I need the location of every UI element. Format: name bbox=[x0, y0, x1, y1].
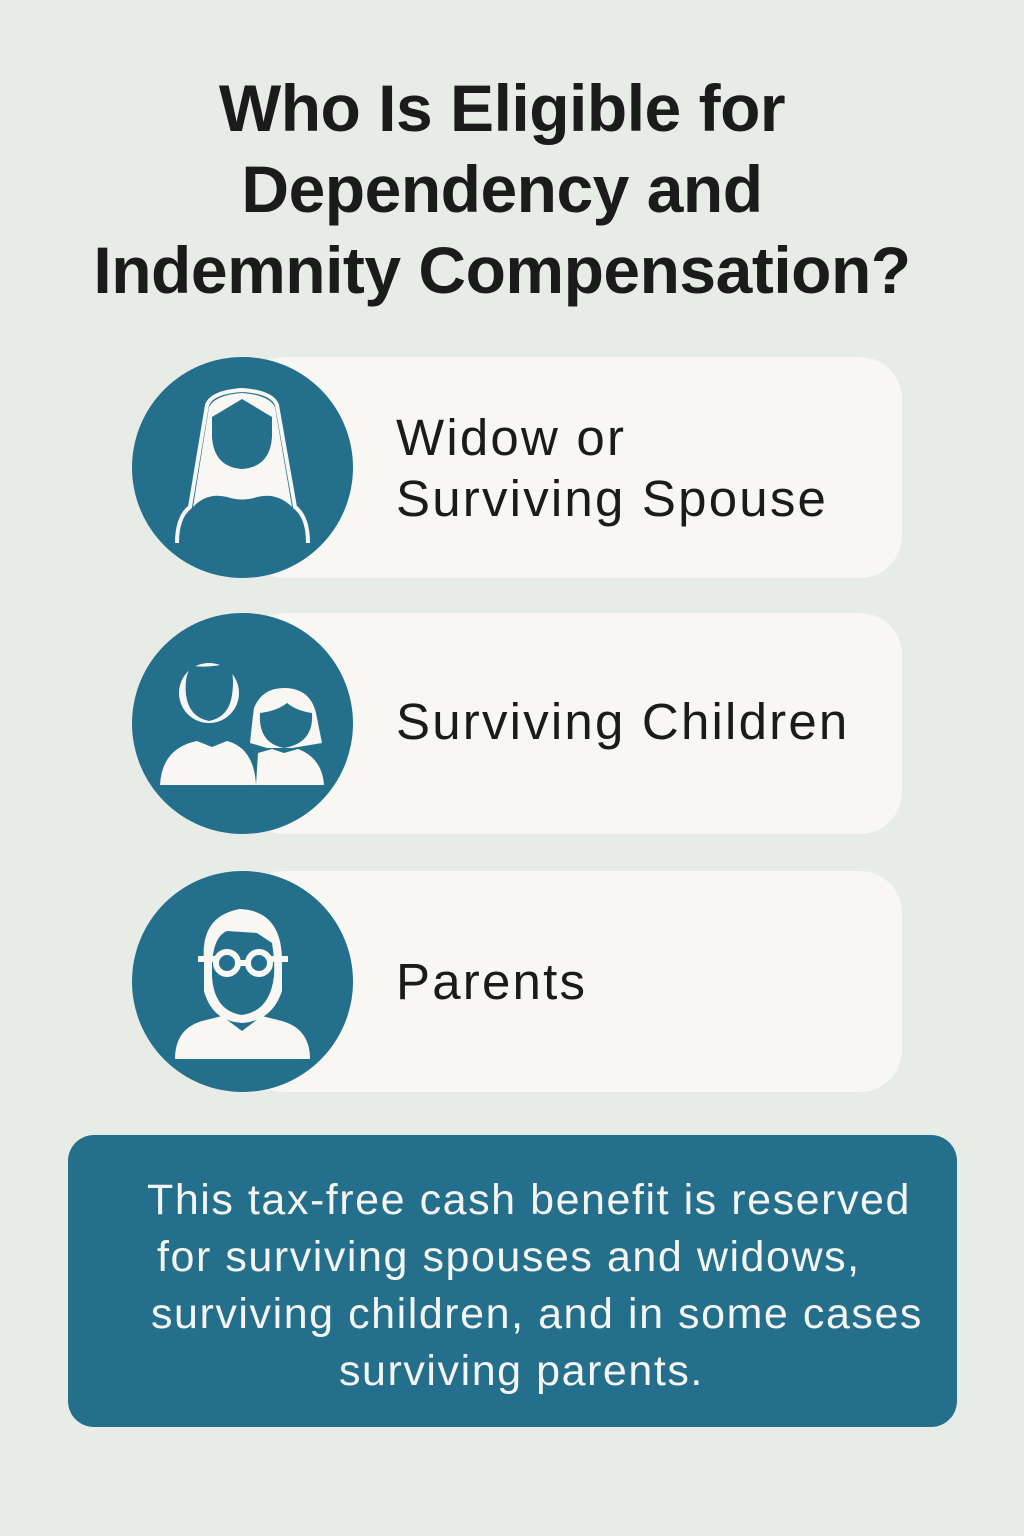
card: widow: Surviving Spouse bbox=[396, 470, 828, 527]
title bbox=[93, 71, 911, 307]
icon: children bbox=[132, 613, 353, 834]
card: parents bbox=[242, 871, 902, 1092]
callout: surviving children, and in some cases bbox=[151, 1290, 923, 1338]
card: parents: Parents bbox=[396, 953, 587, 1010]
card: children: Surviving Children bbox=[396, 693, 849, 750]
icon: parents bbox=[132, 871, 353, 1092]
title: Dependency and bbox=[241, 152, 763, 226]
callout: for surviving spouses and widows, bbox=[157, 1233, 861, 1281]
card: children bbox=[242, 613, 902, 834]
icon: widow bbox=[132, 357, 353, 578]
callout: surviving parents. bbox=[339, 1347, 704, 1395]
title: Who Is Eligible for bbox=[219, 71, 785, 145]
card: widow bbox=[242, 357, 902, 578]
title: Indemnity Compensation? bbox=[93, 233, 911, 307]
card: widow: Widow or bbox=[396, 409, 626, 466]
callout bbox=[68, 1135, 957, 1427]
callout: This tax-free cash benefit is reserved bbox=[147, 1176, 911, 1224]
